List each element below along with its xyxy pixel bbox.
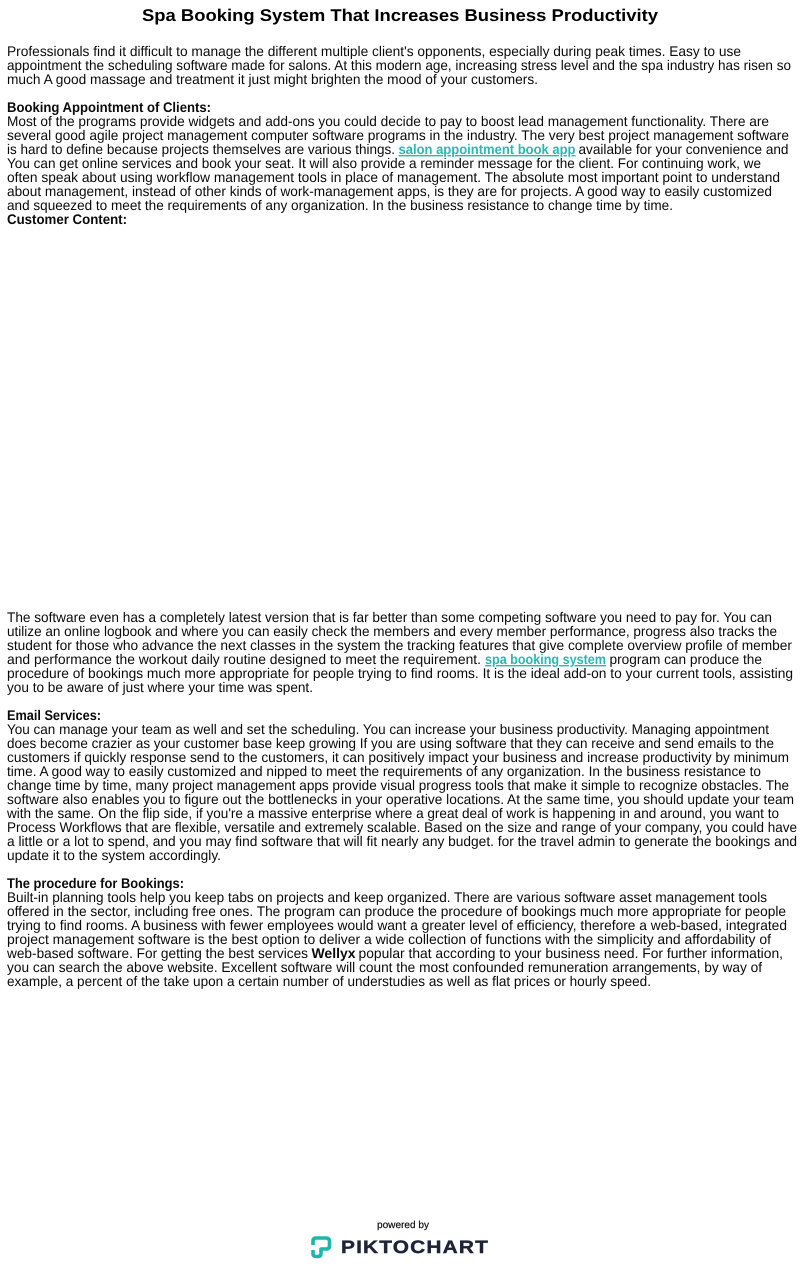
wordmark: PIKTOCHART — [341, 1237, 489, 1257]
text block: booking appointment: often speak about using workflow management tools in place of management. The absolute most important point to understand — [7, 169, 780, 185]
text block: booking appointment: several good agile project management computer software programs in the industry. The very best project management software — [7, 127, 789, 143]
text block: booking appointment: available for your convenience and — [578, 141, 788, 157]
text block: customer content: procedure of bookings much more appropriate for people trying to find rooms. It is the ideal add-on to your current tools, assisting — [7, 665, 793, 681]
text block: booking appointment — [7, 113, 789, 213]
text block: the procedure for bookings: Built-in planning tools help you keep tabs on projects and keep organized. There are various software asset management tools — [7, 889, 767, 905]
text block: the procedure for bookings: Wellyx — [312, 945, 356, 961]
text block: email services: customers if quickly response send to the customers, it can positively impact your business and increase productivity by minimum — [7, 749, 789, 765]
text block: booking appointment: and squeezed to meet the requirements of any organization. In the business resistance to change time by time. — [7, 197, 673, 213]
heading: email services: Email Services: — [7, 707, 101, 723]
text block: introduction: appointment the scheduling software made for salons. At this modern age, increasing stress level and the spa industry has risen so — [7, 57, 791, 73]
heading: booking appointment of clients: Booking Appointment of Clients: — [7, 99, 211, 115]
text block: introduction — [7, 43, 791, 87]
heading: customer content: Customer Content: — [7, 211, 127, 227]
heading: the procedure for bookings: The procedure for Bookings: — [7, 875, 184, 891]
text block: customer content: you to be aware of just where your time was spent. — [7, 679, 313, 695]
text block: email services: You can manage your team as well and set the scheduling. You can increase your business productivity. Managing appointment — [7, 721, 769, 737]
text block: customer content: The software even has a completely latest version that is far better than some competing software you need to pay for. You can — [7, 609, 772, 625]
text block: booking appointment: is hard to define because projects themselves are various things. — [7, 141, 395, 157]
text block: customer content: student for those who advance the next classes in the system the tracking features that give complete overview profile of member — [7, 637, 792, 653]
text block: the procedure for bookings: you can search the above website. Excellent software will count the most confounded remuneration arrangements, by way of — [7, 959, 762, 975]
text block: email services — [6, 721, 797, 863]
powered by label: powered by — [377, 1220, 429, 1231]
text block: the procedure for bookings — [6, 889, 787, 989]
text block: booking appointment: Most of the programs provide widgets and add-ons you could decide to pay to boost lead management functionality. There are — [7, 113, 769, 129]
text block: email services: a little or a lot to spend, and you may find software that will fit nearly any budget. for the travel admin to generate the bookings and — [7, 833, 797, 849]
icon: piktochart logo mark — [313, 1238, 330, 1256]
text block: customer content — [7, 609, 793, 695]
text block: the procedure for bookings: trying to find rooms. A business with fewer employees would want a greater level of efficiency, therefore a web-based, integrated — [7, 917, 787, 933]
text block: booking appointment: salon appointment book app — [398, 141, 576, 157]
text block: the procedure for bookings: example, a percent of the take upon a certain number of understudies as well as flat prices or hourly speed. — [7, 973, 651, 989]
text block: customer content: utilize an online logbook and where you can easily check the members and every member performance, progress also tracks the — [7, 623, 777, 639]
text block: introduction: much A good massage and treatment it just might brighten the mood of your customers. — [7, 71, 538, 87]
text block: the procedure for bookings: project management software is the best option to deliver a wide collection of functions with the simplicity and affordability of — [7, 931, 771, 947]
text block: email services: with the same. On the flip side, if you're a massive enterprise where a great deal of work is happening in and around, you want to — [6, 805, 779, 821]
text block: email services: software also enables you to figure out the bottlenecks in your operative locations. At the same time, you should update your team — [7, 791, 794, 807]
footer: powered by piktochart — [313, 1220, 489, 1257]
text block: email services: change time by time, many project management apps provide visual progress tools that make it simple to recognize obstacles. The — [7, 777, 789, 793]
text block: the procedure for bookings: offered in the sector, including free ones. The program can produce the procedure of bookings much more appropriate for people — [7, 903, 786, 919]
title: Spa Booking System That Increases Business Productivity — [142, 6, 659, 25]
text block: booking appointment: You can get online services and book your seat. It will also provide a reminder message for the client. For continuing work, we — [7, 155, 761, 171]
text block: customer content: program can produce the — [610, 651, 762, 667]
text block: customer content: and performance the workout daily routine designed to meet the requirement. — [7, 651, 481, 667]
text block: customer content: spa booking system — [485, 651, 606, 667]
text block: email services: does become crazier as your customer base keep growing If you are using software that they can receive and send emails to the — [7, 735, 774, 751]
text block: the procedure for bookings: popular that according to your business need. For further information, — [358, 945, 783, 961]
text block: the procedure for bookings: web-based software. For getting the best services — [6, 945, 308, 961]
text block: email services: update it to the system accordingly. — [7, 847, 221, 863]
text block: email services: time. A good way to easily customized and nipped to meet the requirements of any organization. In the business resistance to — [7, 763, 761, 779]
text block: introduction: Professionals find it difficult to manage the different multiple client's opponents, especially during peak times. Easy to use — [7, 43, 741, 59]
text block: booking appointment: about management, instead of other kinds of work-management apps, is they are for projects. A good way to easily customized — [7, 183, 772, 199]
